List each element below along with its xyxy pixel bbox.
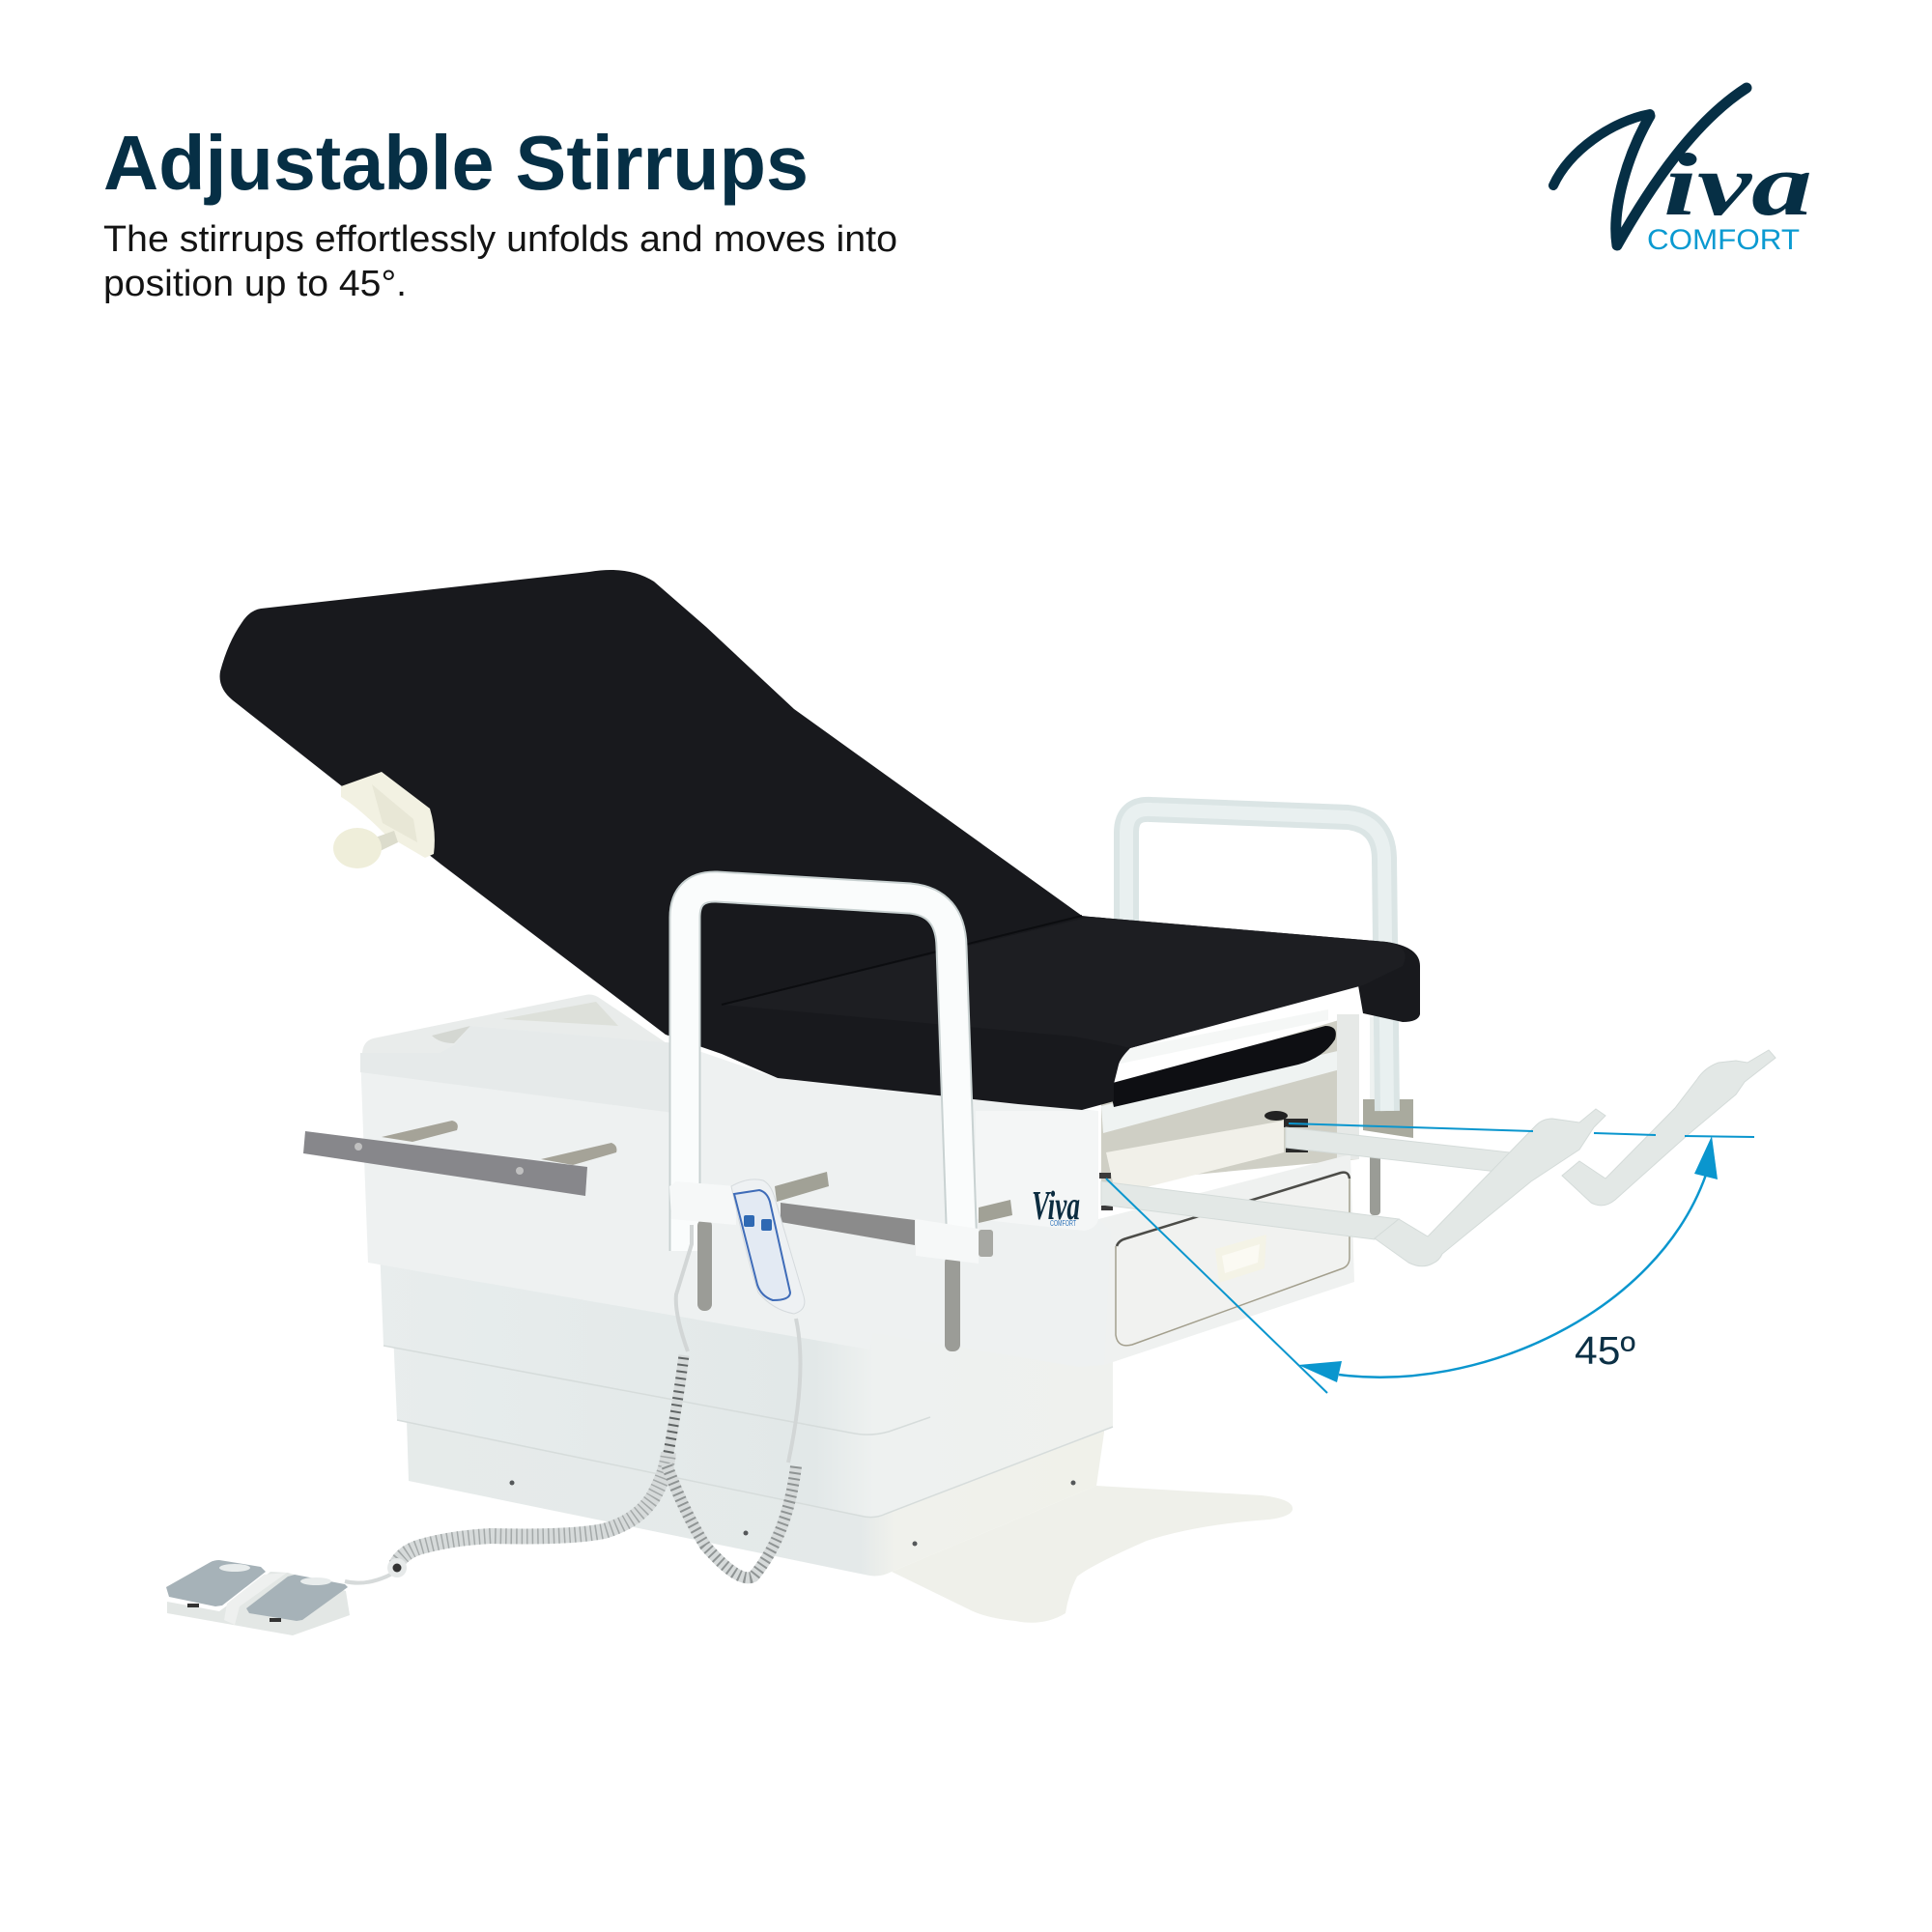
angle line: open position [1106,1179,1327,1393]
front bracket panel with small logo: COMFORT [1050,1219,1076,1228]
left pedal [166,1560,266,1606]
drawer handle [1215,1235,1266,1283]
seat seam [722,916,1082,1005]
foot pedal [166,1560,350,1635]
front stirrup arm [1101,1181,1399,1239]
seat surface [722,917,1406,1048]
description text [103,219,897,304]
description text: The stirrups effortlessly unfolds and moves into [103,219,897,260]
arrowhead: left [1298,1361,1342,1382]
mattress [220,570,1420,1110]
upper body top surface [362,995,681,1058]
front bracket panel with small logo [976,1111,1098,1231]
hand remote [731,1179,805,1314]
angle line: horizontal reference [1289,1123,1754,1137]
drawer side housing [1098,1154,1354,1365]
tier 2 [380,1246,1113,1435]
rear rail post and bracket [1363,1017,1413,1215]
right clamp and pin [916,1219,993,1351]
headrest clamp and knob [333,772,435,868]
backrest [220,570,1420,1110]
tier 4 [407,1410,1104,1576]
coiled cord to foot pedal [345,1225,692,1583]
coiled cord to hand remote [667,1319,800,1577]
front side rail [775,1172,915,1245]
undercarriage mechanism [1099,1009,1359,1210]
angle arc with arrows [1298,1136,1718,1382]
foot plate [892,1486,1293,1623]
right pedal [246,1575,348,1621]
front bracket panel with small logo: Viva [1032,1184,1080,1229]
description text: position up to 45°. [103,264,407,304]
title: Adjustable Stirrups [103,120,809,206]
rear handrail [1126,810,1387,1111]
tier 3 [393,1333,1113,1518]
front handrail [685,887,962,1251]
logo: Viva Comfort [1553,88,1812,256]
upper body front face [360,1026,1111,1367]
logo: Viva Comfort: COMFORT [1647,224,1800,256]
rear stirrup [1286,1127,1510,1172]
stirrups [1101,1050,1776,1266]
left clamp and pin [669,1181,736,1311]
logo: Viva Comfort: iva [1663,135,1812,234]
angle label: 45º [1575,1328,1635,1373]
left side rail [303,1121,616,1196]
column screws [510,1480,1076,1546]
pedal base [167,1572,350,1635]
base column tiers [380,1246,1113,1576]
front stirrup foot [1375,1109,1605,1266]
arrowhead: top [1694,1136,1718,1179]
right rail post [979,1200,1012,1223]
pedal centre strip [224,1573,287,1625]
